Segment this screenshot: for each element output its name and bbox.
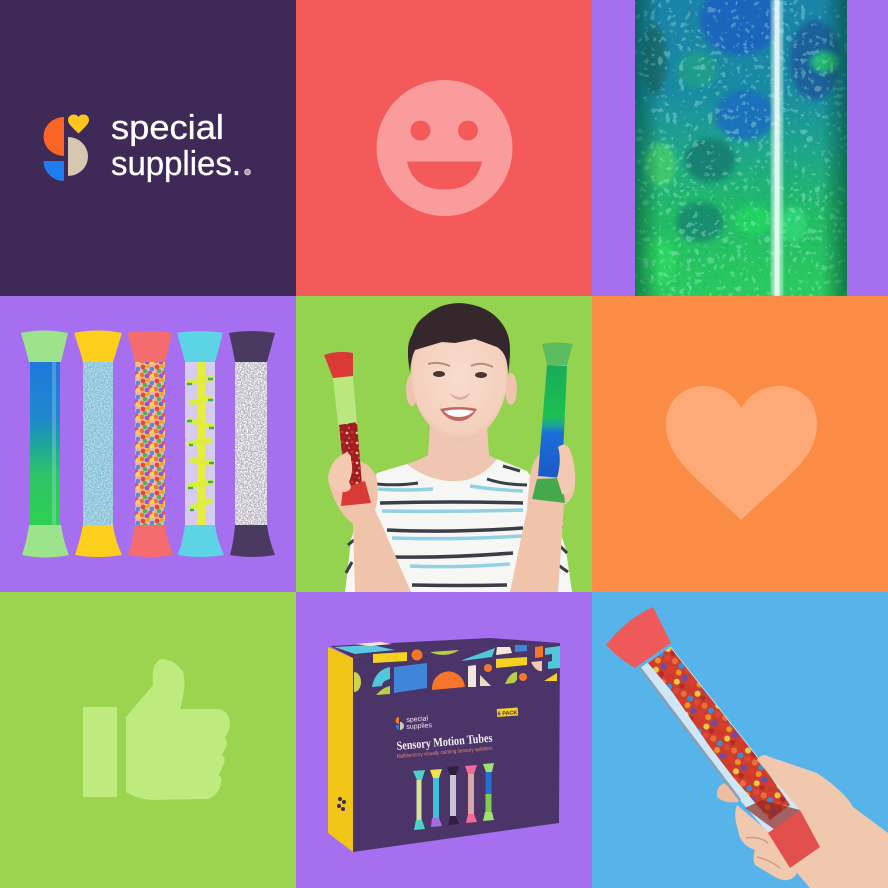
nose shadow: [450, 393, 470, 400]
panel: brand logo: [0, 0, 296, 296]
tube held in right hand: [532, 342, 573, 503]
box title: Sensory Motion Tubes: [396, 731, 493, 753]
smile: [440, 407, 477, 421]
left arm: [328, 455, 411, 592]
box logo: special: [406, 715, 429, 724]
right hand fingers: [557, 445, 575, 494]
tube 1: blue and green: [21, 330, 69, 558]
right arm: [510, 450, 575, 592]
box mini tubes: [413, 763, 494, 830]
box front: [353, 643, 560, 852]
panel: thumbs up: [0, 592, 296, 888]
box side logo: [337, 797, 346, 811]
face: [411, 325, 508, 442]
tube 4: yellow spiral: [177, 331, 224, 557]
tube 2: silver blue glitter: [74, 330, 122, 557]
shirt: [345, 459, 572, 592]
finger creases: [746, 838, 780, 868]
product box: [328, 638, 560, 852]
tube held by hand: [606, 607, 800, 833]
shirt stripes: [346, 466, 568, 586]
pack badge: [497, 708, 518, 717]
tube bottom cap: [768, 810, 820, 868]
hand: [735, 755, 888, 888]
text: logo wordmark: special: [111, 109, 224, 147]
icon: heart: [666, 386, 817, 520]
icon: special supplies logo mark: [43, 114, 89, 181]
boy: [328, 303, 575, 592]
ears: [406, 374, 418, 406]
panel: heart: [592, 296, 888, 592]
tube held in left hand: [324, 352, 371, 506]
index finger behind tube: [717, 783, 740, 802]
panel: product box: [296, 592, 592, 888]
box pattern: [334, 642, 560, 695]
panel: boy holding tubes: [296, 296, 592, 592]
icon: thumbs up: [83, 659, 230, 800]
text: logo wordmark: [111, 109, 250, 183]
hair: [408, 303, 510, 374]
box logo: supplies: [406, 722, 433, 731]
text: logo wordmark: supplies.: [111, 145, 241, 183]
tube 3: rainbow beads: [127, 331, 173, 557]
panel: hand with tube: [592, 592, 888, 888]
left hand fingers: [328, 453, 352, 492]
panel: five tubes: [0, 296, 296, 592]
tube close-up image: [635, 0, 847, 296]
box side: [328, 647, 353, 852]
neck: [407, 425, 497, 481]
box top flap: [330, 638, 560, 658]
panel: lava tube close-up: [592, 0, 888, 296]
tube 5: silver glitter: [229, 331, 275, 557]
box logo: [396, 715, 433, 731]
icon: smiley face: [376, 80, 512, 216]
panel: smiley: [296, 0, 592, 296]
eyes: [433, 371, 487, 378]
box subtitle: Multisensory visually calming sensory splatters: [397, 746, 493, 760]
pack badge: 6 PACK: [498, 710, 518, 717]
